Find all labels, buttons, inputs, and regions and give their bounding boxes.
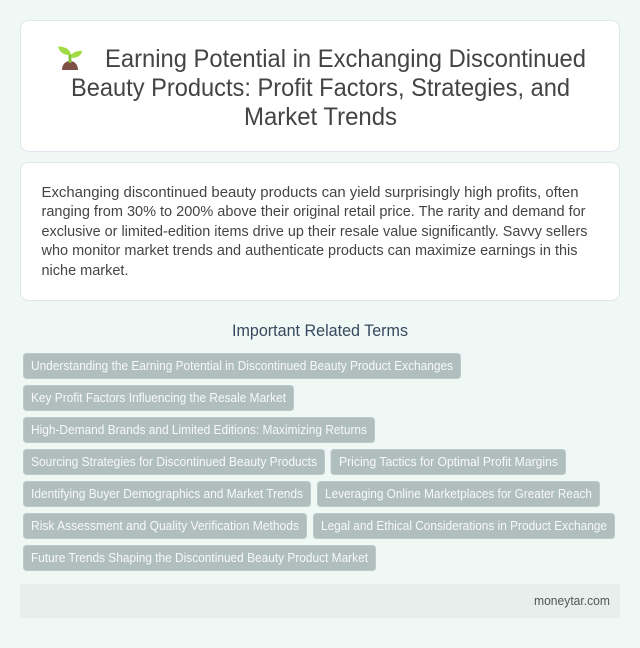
heading: important related terms: Important Related Terms (232, 321, 408, 340)
tag: sourcing strategies (24, 450, 324, 474)
text block: summary paragraph: Exchanging discontinued beauty products can yield surprisingly high profits, often (42, 184, 578, 201)
panel: related term tags (24, 354, 614, 570)
footer: site name: moneytar.com (534, 594, 610, 608)
tag: pricing tactics (331, 450, 566, 474)
tag: buyer demographics: Identifying Buyer Demographics and Market Trends (31, 486, 303, 501)
tag: high-demand brands: High-Demand Brands and Limited Editions: Maximizing Returns (31, 422, 367, 437)
panel: summary card (20, 162, 620, 300)
tag: buyer demographics (24, 482, 310, 506)
text block: summary paragraph: exclusive or limited-edition items drive up their resale value significantly. Savvy sellers (42, 223, 588, 240)
text block: summary paragraph: ranging from 30% to 200% above their original retail price. The rarity and demand for (42, 203, 586, 220)
tag: key profit factors (24, 386, 294, 410)
text block: summary paragraph (41, 184, 587, 279)
tag: online marketplaces: Leveraging Online Marketplaces for Greater Reach (325, 486, 592, 501)
tag: understanding earning potential (24, 354, 460, 378)
heading: title (71, 45, 586, 131)
heading: title: Beauty Products: Profit Factors, Strategies, and (71, 74, 570, 102)
heading: title: Earning Potential in Exchanging Discontinued (105, 45, 586, 73)
tag: legal and ethical (314, 514, 614, 538)
text block: summary paragraph: niche market. (42, 262, 128, 279)
icon: seedling (58, 46, 82, 70)
tag: sourcing strategies: Sourcing Strategies for Discontinued Beauty Products (31, 454, 317, 469)
footer bar (20, 584, 620, 618)
tag: legal and ethical: Legal and Ethical Considerations in Product Exchange (321, 518, 607, 533)
tag: key profit factors: Key Profit Factors Influencing the Resale Market (31, 390, 286, 405)
tag: high-demand brands (24, 418, 374, 442)
tag: risk assessment: Risk Assessment and Quality Verification Methods (31, 518, 299, 533)
panel: title card (20, 20, 620, 152)
text block: summary paragraph: who monitor market trends and authenticate products can maximize earnings in this (41, 242, 577, 259)
tag: risk assessment (24, 514, 306, 538)
tag: pricing tactics: Pricing Tactics for Optimal Profit Margins (339, 454, 558, 469)
tag: future trends (24, 546, 376, 570)
tag: future trends: Future Trends Shaping the Discontinued Beauty Product Market (31, 550, 368, 565)
tag: online marketplaces (318, 482, 600, 506)
heading: title: Market Trends (244, 103, 397, 131)
tag: understanding earning potential: Understanding the Earning Potential in Discontinued Beauty Product Exchanges (31, 358, 453, 373)
